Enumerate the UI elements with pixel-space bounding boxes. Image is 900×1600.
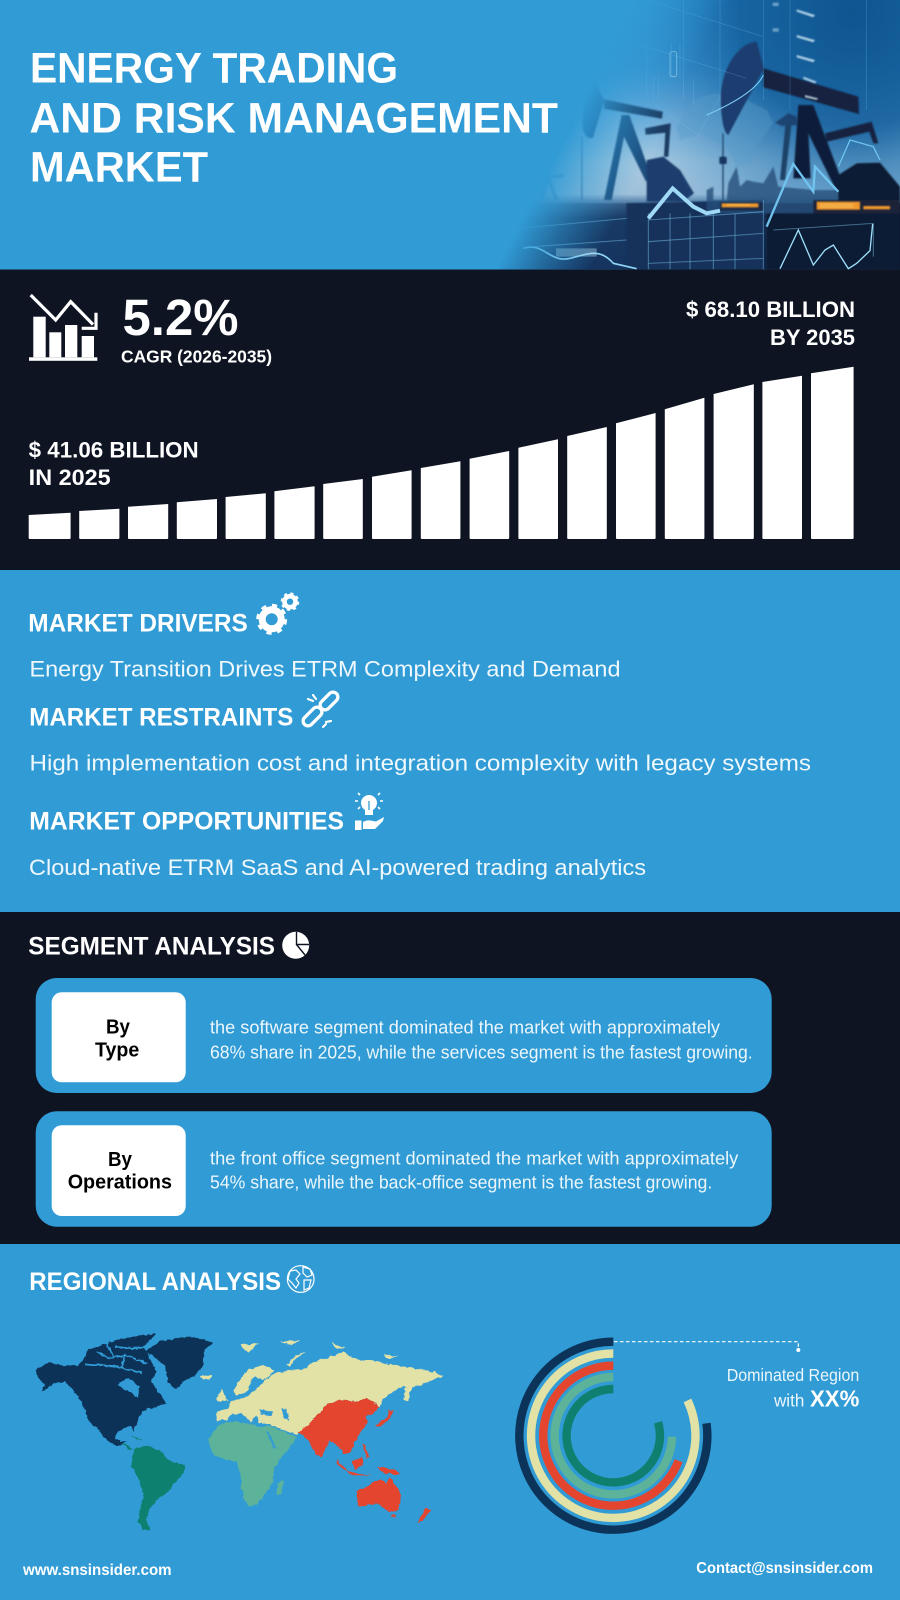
text: driver: Energy Transition Drives ETRM Complexity and Demand <box>30 657 620 682</box>
callout: dominated region <box>727 1365 859 1412</box>
title <box>30 45 558 192</box>
map: South America <box>121 1435 185 1530</box>
icon: declining bar chart <box>29 295 97 361</box>
footer: contact: Contact@snsinsider.com <box>696 1560 873 1577</box>
icon: pie chart <box>282 932 309 959</box>
2035 value <box>686 297 855 350</box>
card: by operations: 54% share, while the back-office segment is the fastest growing. <box>210 1172 712 1193</box>
title: MARKET <box>30 144 208 192</box>
heading: regional analysis: REGIONAL ANALYSIS <box>29 1268 281 1296</box>
panel: regional analysis <box>0 1244 900 1600</box>
card: by operations: By <box>108 1149 133 1171</box>
Africa-like map ghost <box>677 93 773 167</box>
small pumpjack <box>582 83 604 138</box>
panel: segment analysis <box>0 912 900 1244</box>
large pumpjack <box>721 42 764 135</box>
heading: market opportunities: MARKET OPPORTUNITIES <box>29 807 344 835</box>
card: by type: By <box>106 1016 131 1038</box>
2025 value <box>29 438 199 490</box>
grid lines <box>520 200 873 269</box>
map: Asia Pacific <box>298 1398 431 1523</box>
bar chart: market growth <box>29 367 854 539</box>
2025 value: IN 2025 <box>29 465 111 490</box>
heading: market drivers: MARKET DRIVERS <box>28 609 248 637</box>
heading: segment analysis: SEGMENT ANALYSIS <box>28 932 275 960</box>
header photo: oil pumpjacks with trading charts <box>480 0 900 269</box>
refinery lights <box>720 202 763 211</box>
CAGR value: 5.2% <box>122 289 238 346</box>
card: by type: the software segment dominated the market with approximately <box>210 1016 721 1037</box>
small far pumpjack <box>550 174 564 200</box>
map: Red Sea <box>266 1431 277 1448</box>
radial bar chart <box>519 1342 707 1530</box>
title: ENERGY TRADING <box>30 45 398 93</box>
2035 value: $ 68.10 BILLION <box>686 297 855 322</box>
text: opportunity: Cloud-native ETRM SaaS and AI-powered trading analytics <box>29 855 646 880</box>
CAGR label: CAGR (2026-2035) <box>121 346 272 366</box>
icon: gears <box>258 594 298 633</box>
card: by operations: the front office segment dominated the market with approximately <box>210 1147 739 1168</box>
icon: globe <box>287 1266 314 1292</box>
heading: market restraints: MARKET RESTRAINTS <box>29 704 293 732</box>
map: North America <box>36 1333 213 1445</box>
callout: dominated region: Dominated Region <box>727 1365 859 1385</box>
icon: broken chain link <box>308 695 333 727</box>
thick chart ribbons <box>648 188 720 218</box>
title: AND RISK MANAGEMENT <box>30 94 558 142</box>
panel: header background <box>0 0 900 270</box>
footer: website: www.snsinsider.com <box>22 1562 172 1579</box>
card: by operations <box>36 1111 772 1227</box>
2035 value: BY 2035 <box>770 325 855 350</box>
map: Eurasia <box>200 1341 444 1435</box>
card: by operations: Operations <box>68 1172 172 1194</box>
white data dots <box>773 3 818 100</box>
panel: market size <box>0 270 900 570</box>
callout: dominated region: XX% <box>810 1386 859 1412</box>
card: by type: Type <box>95 1040 139 1062</box>
callout: dominated region: with <box>773 1391 804 1411</box>
icon: bulb in hand <box>355 793 384 830</box>
dashed leader line <box>614 1342 800 1352</box>
2025 value: $ 41.06 BILLION <box>29 438 199 463</box>
map: Africa <box>208 1421 297 1506</box>
text: restraint: High implementation cost and integration complexity with legacy systems <box>30 751 811 776</box>
card: by type: 68% share in 2025, while the services segment is the fastest growing. <box>210 1041 753 1062</box>
card: by type <box>36 978 772 1093</box>
world map <box>36 1333 444 1530</box>
panel: drivers, restraints, opportunities <box>0 570 900 912</box>
map: inland seas <box>259 1407 289 1421</box>
refinery skyline <box>706 166 840 214</box>
map: arctic channels and Hudson Bay <box>85 1343 147 1397</box>
